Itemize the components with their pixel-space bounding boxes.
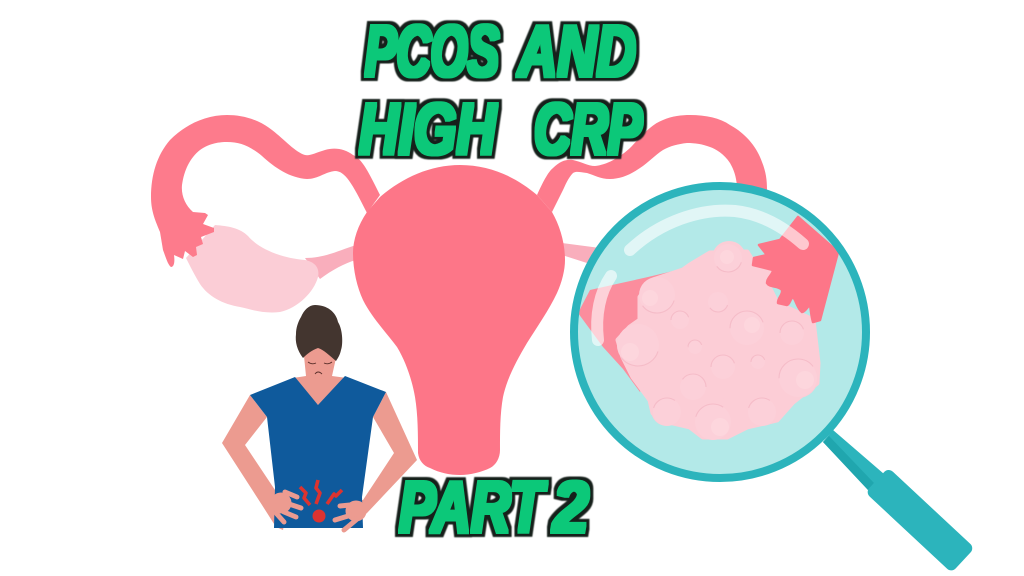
glass handle grip [865,468,975,573]
title word PCOS: PCOS [365,12,499,92]
left ovary ligament [305,245,356,279]
lens highlights [597,211,803,340]
polycystic ovary [617,241,818,440]
part number: 2 [551,468,589,548]
hair [296,305,342,361]
uterus body [353,165,565,475]
pain symbol [300,480,342,505]
face and neck [293,342,347,406]
part label [399,468,589,548]
cyst outlines [617,262,814,440]
left arm [222,395,290,530]
uterus diagram [151,115,767,475]
ligament inside lens [579,271,672,392]
facial features [308,362,332,374]
left ovary [186,225,318,312]
title [359,12,643,170]
title word CRP: CRP [534,90,643,170]
title word AND: AND [516,12,636,92]
cyst highlights [621,250,814,436]
woman with abdominal pain [222,305,417,531]
part word: PART [399,468,548,548]
left hand [273,492,301,522]
right hand [335,503,364,530]
pain centre [312,510,326,522]
magnified view [578,211,838,440]
ovary edge lobes [617,241,818,440]
lens [574,186,866,478]
lens ring [574,186,866,478]
blue top [250,376,386,528]
right fallopian tube [537,115,767,212]
left fallopian tube [151,115,380,267]
tube fimbriae inside lens [753,217,838,322]
glass handle neck [823,430,884,490]
right ovary ligament [562,243,600,264]
title word HIGH: HIGH [359,90,498,170]
magnifying glass [574,186,975,573]
right arm [340,392,417,531]
infographic canvas [151,19,972,570]
